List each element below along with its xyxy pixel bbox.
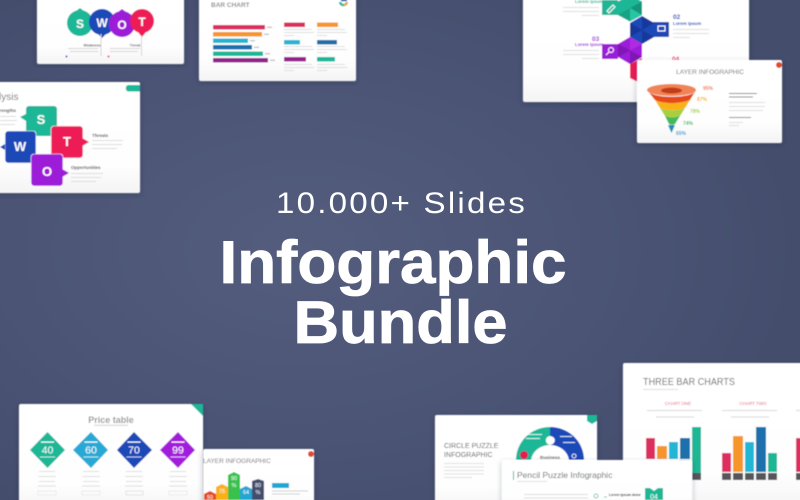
chart two <box>722 401 777 480</box>
heading: price table: Price table <box>88 415 134 425</box>
heading: INFOGRAPHIC <box>444 452 493 459</box>
price diamonds: 70 <box>128 444 140 456</box>
SWOT tiles: O <box>42 164 52 179</box>
price diamonds: 99 <box>172 444 184 456</box>
panel: circle puzzle slide <box>435 415 597 500</box>
step 04 tag <box>645 488 663 500</box>
SWOT labels: Opportunities <box>71 165 101 170</box>
panel: hexagon process slide <box>523 0 749 102</box>
funnel percentages: 78% <box>690 109 701 115</box>
panel: bar chart slide <box>199 0 356 81</box>
horizontal bars <box>213 25 268 62</box>
SWOT circles captions: Weakness <box>83 44 101 48</box>
price diamonds <box>30 432 195 468</box>
SWOT labels: Threats <box>92 133 109 138</box>
SWOT tiles: S <box>37 112 46 127</box>
label: Lorem Ipsum dolor <box>609 493 641 497</box>
panel: layer infographic funnel slide <box>637 60 782 143</box>
funnel chart <box>647 84 696 133</box>
icon: logo ring <box>340 0 347 5</box>
funnel percentages: 95% <box>703 86 714 92</box>
heading: LAYER INFOGRAPHIC <box>203 458 271 465</box>
bar values <box>250 26 275 61</box>
SWOT circles: S <box>76 17 84 31</box>
subtitle: 10.000+ Slides <box>276 187 527 220</box>
SWOT tiles: T <box>63 134 71 149</box>
legend text <box>284 29 347 71</box>
accent bar <box>513 471 514 480</box>
funnel percentages: 65% <box>676 131 687 137</box>
heading: THREE BAR CHARTS <box>643 377 735 388</box>
price diamonds: 40 <box>42 444 53 456</box>
heading: bar chart: BAR CHART <box>211 2 250 9</box>
title line 2: Bundle <box>294 289 508 356</box>
corner tab <box>587 415 597 424</box>
chart three <box>796 410 800 480</box>
corner badge <box>308 451 314 457</box>
hexagon chain <box>602 0 669 84</box>
step labels: 04 <box>672 56 680 63</box>
puzzle center label: Business <box>540 455 560 460</box>
funnel percentages: 74% <box>683 121 694 127</box>
step labels <box>575 0 701 63</box>
heading: CIRCLE PUZZLE <box>444 443 499 450</box>
puzzle arc <box>516 427 584 460</box>
legend tags <box>284 22 338 62</box>
funnel notes <box>729 93 765 126</box>
SWOT circles <box>67 8 154 38</box>
title block <box>220 187 566 356</box>
step labels: 02 <box>673 14 681 21</box>
icon: puzzle pieces <box>594 494 607 498</box>
SWOT circles: T <box>138 15 146 29</box>
step labels: Lorem Ipsum <box>673 21 701 26</box>
legend tag <box>272 483 289 488</box>
panel: SWOT analysis slide <box>0 82 140 193</box>
body text <box>444 463 484 478</box>
SWOT circles: O <box>117 18 127 32</box>
panel: SWOT circles slide <box>37 0 184 64</box>
body text <box>524 494 588 498</box>
title line 1: Infographic <box>220 229 566 296</box>
price diamonds: 60 <box>85 444 97 456</box>
SWOT descriptions <box>0 116 123 182</box>
column chart: 64 <box>243 490 249 496</box>
hexagon icons <box>606 5 665 55</box>
SWOT circles captions <box>66 34 142 58</box>
column chart <box>204 472 264 500</box>
price feature lists <box>38 471 187 495</box>
column chart: % <box>232 483 237 489</box>
step descriptions <box>563 7 709 59</box>
corner badge <box>776 62 782 68</box>
column chart: 75 <box>219 489 225 495</box>
tab <box>126 85 140 92</box>
column chart: % <box>256 490 261 496</box>
heading <box>444 443 499 459</box>
SWOT labels <box>0 108 109 170</box>
SWOT tiles <box>0 106 89 186</box>
panel: layer infographic columns slide <box>203 449 314 500</box>
SWOT circles: W <box>96 16 108 30</box>
heading: layer infographic: LAYER INFOGRAPHIC <box>676 69 744 76</box>
corner tab <box>191 404 203 416</box>
SWOT circles captions: Threat <box>130 44 141 48</box>
funnel percentages <box>676 86 714 137</box>
panel: price table slide <box>19 404 203 500</box>
funnel percentages: 87% <box>697 97 708 103</box>
legend text <box>272 490 308 494</box>
SWOT tiles: W <box>14 139 27 154</box>
heading: Pencil Puzzle Infographic <box>517 470 613 480</box>
column chart: 90 <box>231 476 237 482</box>
step labels: 03 <box>592 36 600 43</box>
chart two: CHART TWO <box>739 401 767 406</box>
panel: three bar charts slide <box>623 363 800 500</box>
column chart: 80 <box>255 483 261 489</box>
chart one: CHART ONE <box>665 401 691 406</box>
panel: pencil puzzle slide <box>502 460 692 500</box>
step labels: Lorem Ipsum <box>575 42 603 47</box>
chart one <box>646 401 702 480</box>
